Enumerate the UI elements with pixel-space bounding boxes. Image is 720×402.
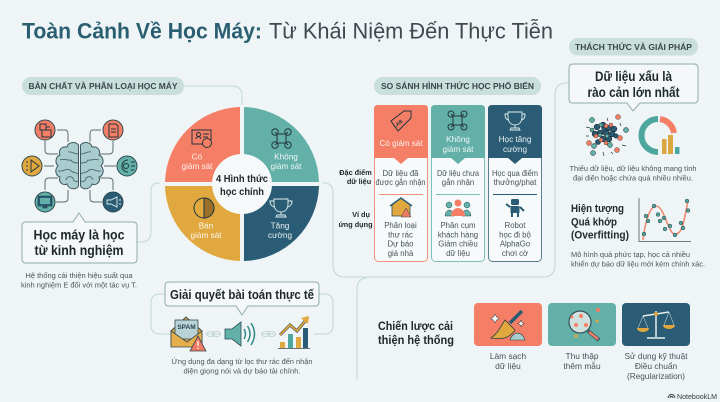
card: supervised — [374, 105, 428, 262]
strategy: collect more samples: Thu thập — [565, 351, 599, 361]
title: Toàn Cảnh Về Học Máy: — [22, 18, 262, 44]
heading: comparison: SO SÁNH HÌNH THỨC HỌC PHỔ BIẾN — [381, 80, 534, 91]
donut chart: four learning types — [165, 107, 319, 261]
card: unsupervised — [431, 105, 485, 262]
card: supervised: Dữ liệu đã — [382, 169, 419, 178]
text block: definition: kinh nghiệm E đối với một tác vụ T. — [21, 280, 137, 290]
card: reinforcement: Học qua điểm — [492, 169, 538, 178]
icon: documents node — [35, 120, 55, 140]
card: supervised: được gắn nhận — [376, 178, 426, 187]
segment: unsupervised: giám sát — [271, 162, 302, 171]
heading: overfitting: Hiện tượng — [571, 203, 624, 215]
row labels: Đặc điểm — [339, 168, 372, 177]
segment: reinforcement: Tăng — [271, 222, 290, 230]
icon: gear node — [117, 156, 137, 176]
text block: overfitting description — [571, 250, 705, 268]
segment: supervised — [165, 107, 240, 182]
segment: unsupervised — [244, 107, 319, 182]
icon: megaphone node — [103, 192, 123, 212]
text block: definition — [21, 271, 137, 290]
icon: finance chart — [278, 316, 310, 348]
heading: overfitting — [571, 203, 629, 242]
card header — [488, 105, 542, 164]
card: supervised: Dự báo — [387, 240, 414, 248]
icon: robot — [506, 199, 524, 217]
card: reinforcement: Robot — [505, 221, 526, 230]
segment: reinforcement — [244, 186, 319, 261]
card: reinforcement: AlphaGo — [500, 240, 531, 248]
card: supervised: thư rác — [388, 230, 413, 240]
icon: chain link left — [206, 332, 220, 336]
strategy: clean data: dữ liệu — [495, 361, 521, 371]
card: supervised: giá nhà — [388, 249, 414, 258]
text block: data issues: đại diện hoặc chứa quá nhiều nhiều. — [573, 174, 693, 182]
icon group: brain with satellite icons — [22, 120, 137, 212]
icon: play node — [22, 156, 42, 176]
callout: bad data: rào cản lớn nhất — [588, 84, 680, 100]
strategy: clean data: Làm sạch — [490, 351, 526, 361]
segment: semi-supervised: giám sát — [191, 231, 222, 240]
callout: bad data: Dữ liệu xấu là — [595, 68, 672, 84]
card: reinforcement: chơi cờ — [502, 249, 528, 258]
icon: monitor node — [35, 192, 55, 212]
icon: scales — [622, 303, 690, 346]
card: reinforcement: học đi bộ — [499, 230, 531, 240]
icon: broom — [474, 303, 542, 346]
center label — [212, 154, 272, 214]
card: unsupervised: gắn nhận — [442, 178, 474, 187]
card: unsupervised: khách hàng — [438, 230, 478, 240]
icon: house — [390, 198, 412, 217]
segment: supervised: giám sát — [182, 162, 213, 171]
heading: comparison — [374, 77, 541, 95]
icon: brain — [56, 143, 103, 189]
icon: chain link right — [262, 332, 276, 336]
heading: improvement strategies: Chiến lược cải — [378, 319, 453, 333]
watermark: NotebookLM: NotebookLM — [677, 394, 717, 401]
card header — [431, 105, 485, 164]
icon: spam envelope: SPAM — [177, 324, 196, 331]
segment: reinforcement: cường — [268, 231, 292, 240]
strategy: regularization: Điều chuẩn — [635, 361, 678, 371]
card header: LAB — [392, 118, 405, 130]
strategy: regularization: (Regularization) — [627, 371, 685, 381]
text block: overfitting description: Mô hình quá phức tạp, học cả nhiều — [571, 250, 690, 259]
callout: solving real problems — [165, 282, 319, 315]
card header: cường — [503, 145, 527, 154]
row labels: Ví dụ — [352, 210, 370, 219]
icon: people — [445, 200, 471, 216]
card: unsupervised: Giảm chiều — [438, 240, 478, 248]
heading: nature and classification — [22, 77, 184, 95]
callout: learning from experience — [22, 213, 137, 263]
icon: document node — [103, 120, 123, 140]
card header: Không — [446, 135, 470, 144]
text block: overfitting description: khiến dự báo dữ liệu mới kém chính xác. — [571, 260, 705, 268]
text block: applications: Ứng dụng đa dạng từ lọc thư rác đến nhận — [172, 357, 312, 366]
heading: challenges — [569, 38, 698, 56]
callout: solving real problems: Giải quyết bài toán thực tế — [170, 288, 314, 302]
text block: applications: diện giọng nói và dự báo tài chính. — [184, 366, 300, 376]
card: supervised: Phân loại — [384, 221, 417, 230]
icon row: spam, voice, finance — [171, 316, 310, 351]
text block: applications — [172, 357, 312, 376]
callout: learning from experience: Học máy là học — [34, 226, 125, 242]
icon: speaker — [225, 322, 254, 346]
center label: học chính — [220, 187, 264, 198]
center label: 4 Hình thức — [216, 174, 268, 185]
callout: learning from experience: từ kinh nghiệm — [34, 242, 124, 258]
strategy: regularization: Sử dụng kỹ thuật — [624, 351, 688, 361]
segment: supervised: Có — [192, 152, 203, 162]
row labels: dữ liệu — [347, 177, 371, 186]
card: unsupervised: dữ liệu — [446, 249, 470, 258]
callout: bad data — [569, 64, 698, 111]
card header: Có giám sát — [380, 139, 423, 148]
card: unsupervised: Phân cụm — [440, 221, 476, 230]
heading: improvement strategies: thiện hệ thống — [378, 333, 454, 347]
card: reinforcement — [488, 105, 542, 262]
icon: magnifier with dots — [548, 303, 616, 346]
chart: overfitting curve — [639, 198, 691, 242]
row labels: ứng dụng — [338, 220, 373, 229]
heading: overfitting: Quá khớp — [571, 216, 617, 228]
row labels — [338, 168, 373, 229]
heading: challenges: THÁCH THỨC VÀ GIẢI PHÁP — [575, 41, 693, 52]
card: unsupervised: Dữ liệu chưa — [437, 169, 480, 178]
strategy: collect more samples — [548, 303, 616, 371]
text block: definition: Hệ thống cải thiện hiệu suất qua — [26, 271, 133, 280]
title: Từ Khái Niệm Đến Thực Tiễn — [269, 18, 553, 44]
strategy: clean data — [474, 303, 542, 371]
card header: giám sát — [443, 145, 474, 154]
segment: unsupervised: Không — [274, 152, 298, 162]
heading: improvement strategies — [378, 319, 454, 347]
card header — [374, 105, 428, 164]
heading: nature and classification: BẢN CHẤT VÀ PHÂN LOẠI HỌC MÁY — [28, 80, 178, 91]
text block: data issues — [570, 164, 696, 182]
segment: semi-supervised — [165, 186, 240, 261]
icon: noisy data scatter — [586, 114, 628, 156]
segment: semi-supervised: Bán — [199, 222, 214, 230]
heading: overfitting: (Overfitting) — [571, 230, 629, 242]
strategy: regularization — [622, 303, 690, 381]
card header: Học tăng — [499, 135, 532, 144]
text block: data issues: Thiếu dữ liệu, dữ liệu không mang tính — [570, 164, 696, 173]
strategy: collect more samples: thêm mẫu — [563, 361, 601, 371]
title — [22, 18, 553, 44]
card: reinforcement: thưởng/phạt — [494, 178, 537, 187]
icon: incomplete donut and bars — [642, 119, 680, 154]
